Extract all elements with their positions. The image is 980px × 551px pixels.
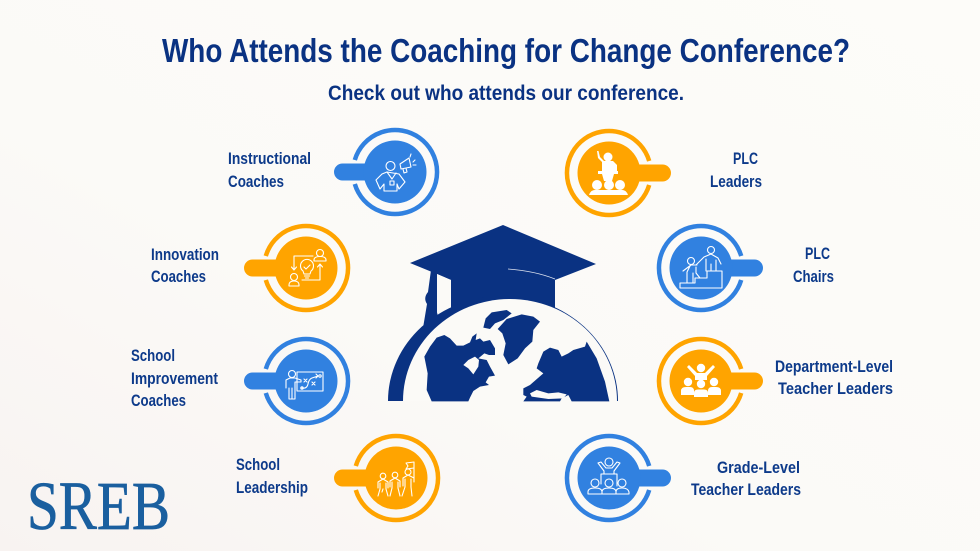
label: Department-Level Teacher Leaders: Department-Level [775, 358, 893, 376]
ring [567, 131, 649, 215]
label: PLC Leaders [710, 150, 762, 191]
disc [670, 236, 732, 300]
icon: team celebrating [681, 364, 721, 397]
cap window [437, 274, 451, 312]
node: Instructional Coaches [334, 130, 437, 214]
central graphic: graduation cap on globe [388, 225, 618, 401]
label: Instructional Coaches [228, 150, 311, 191]
disc [578, 446, 640, 510]
tab [244, 260, 284, 276]
item: PLC Chairs [659, 226, 834, 310]
node: Grade-Level Teacher Leaders [567, 436, 671, 520]
label: PLC Leaders: PLC [733, 150, 758, 168]
disc [274, 236, 338, 300]
Eurasia [523, 342, 609, 401]
ring [356, 436, 438, 520]
item: PLC Leaders [567, 131, 762, 215]
label: Grade-Level Teacher Leaders [691, 459, 801, 499]
globe disc [403, 299, 617, 401]
tab [334, 164, 374, 180]
label: Innovation Coaches: Innovation [151, 246, 219, 264]
Arctic island [483, 310, 512, 329]
icon: coach with megaphone [376, 154, 416, 191]
label: Instructional Coaches: Instructional [228, 150, 311, 168]
icon: speaker at podium [589, 151, 628, 195]
North America [424, 333, 495, 401]
label: Grade-Level Teacher Leaders: Teacher Leaders [691, 481, 801, 499]
label: PLC Leaders: Leaders [710, 173, 762, 191]
label: School Leadership [236, 456, 308, 497]
subtitle: Check out who attends our conference. [328, 81, 684, 105]
label: Innovation Coaches [151, 246, 219, 286]
continents [424, 310, 609, 401]
tab [723, 260, 763, 276]
icon: idea cycle [289, 250, 326, 286]
label: Instructional Coaches: Coaches [228, 173, 284, 191]
label: School Leadership: School [236, 456, 280, 474]
item: School Improvement Coaches [131, 339, 348, 423]
label: School Improvement Coaches: School [131, 347, 175, 365]
ring [355, 130, 437, 214]
tab [631, 470, 671, 486]
tassel [423, 270, 440, 328]
label: Innovation Coaches: Coaches [151, 268, 206, 286]
Mediterranean [530, 390, 567, 399]
disc [670, 350, 732, 412]
cap highlight [508, 269, 555, 279]
ring [659, 226, 741, 310]
ring [659, 339, 741, 423]
tab [244, 372, 284, 390]
node: Department-Level Teacher Leaders [659, 339, 763, 423]
label: School Improvement Coaches: Coaches [131, 392, 186, 410]
icon: strategy board presenter [286, 370, 323, 399]
item: Grade-Level Teacher Leaders [567, 436, 801, 520]
node: PLC Chairs [659, 226, 763, 310]
icon: group with flag [378, 462, 414, 496]
disc [364, 446, 428, 510]
icon: helping up stairs [680, 246, 722, 288]
label: School Improvement Coaches [131, 347, 218, 410]
tab [631, 164, 671, 182]
label: PLC Chairs [793, 245, 834, 286]
ring [567, 436, 649, 520]
item: Department-Level Teacher Leaders [659, 339, 893, 423]
icon: teacher and students [588, 458, 629, 494]
ring [266, 339, 348, 423]
label: School Leadership: Leadership [236, 479, 308, 497]
label: School Improvement Coaches: Improvement [131, 370, 218, 388]
node: School Leadership [334, 436, 438, 520]
label: PLC Chairs: PLC [805, 245, 830, 263]
node: School Improvement Coaches [244, 339, 348, 423]
label: Grade-Level Teacher Leaders: Grade-Level [717, 459, 800, 477]
tab [723, 372, 763, 390]
SREB logo: SREB [27, 468, 170, 544]
globe arc [388, 296, 618, 401]
graduation cap [410, 225, 596, 316]
node: PLC Leaders [567, 131, 671, 215]
tab [334, 470, 374, 486]
title: Who Attends the Coaching for Change Conference? [162, 32, 850, 69]
item: Innovation Coaches [151, 226, 348, 310]
disc [578, 142, 640, 204]
label: PLC Chairs: Chairs [793, 268, 834, 286]
Greenland [498, 314, 540, 364]
item: Instructional Coaches [228, 130, 437, 214]
label: Department-Level Teacher Leaders [775, 358, 893, 398]
disc [364, 140, 426, 204]
label: Department-Level Teacher Leaders: Teacher Leaders [778, 380, 893, 398]
node: Innovation Coaches [244, 226, 348, 310]
ring [266, 226, 348, 310]
item: School Leadership [236, 436, 438, 520]
disc [274, 350, 338, 412]
